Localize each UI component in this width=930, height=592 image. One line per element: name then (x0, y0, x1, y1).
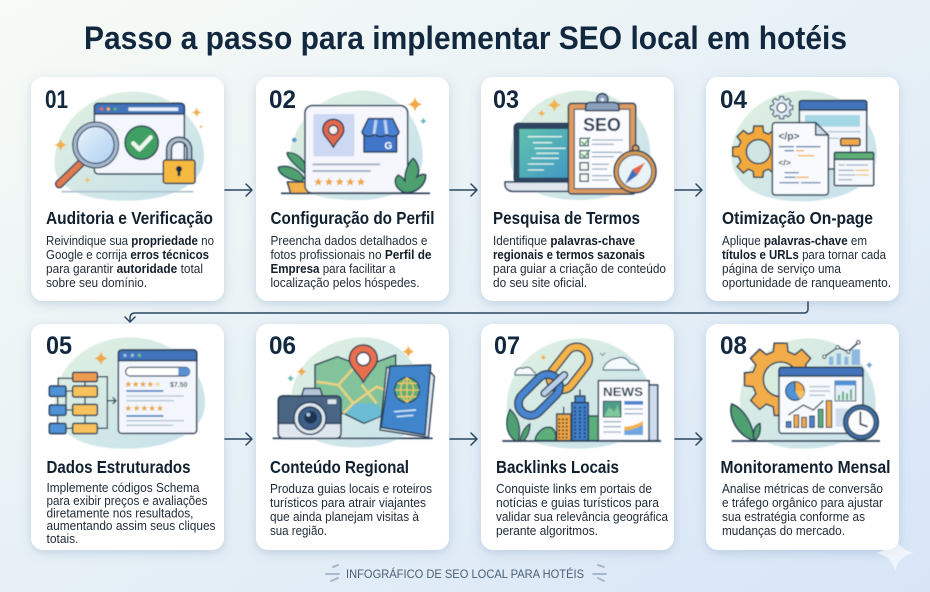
description: títulos e URLs para tornar cada (722, 247, 887, 262)
illustration: laptop, SEO clipboard and compass (505, 91, 656, 200)
panel: step 06 (256, 324, 449, 550)
description: Google e corrija erros técnicos (46, 247, 209, 262)
heading: Backlinks Locais (496, 457, 619, 477)
arrow: 05 to 06 (225, 433, 252, 445)
description: Aplique palavras-chave em (722, 233, 867, 248)
illustration: gear, analytics dashboard and clock (731, 338, 880, 449)
illustration: chain link, city and newspaper: NEWS (603, 385, 643, 399)
illustration: business profile card (278, 91, 430, 200)
illustration: schema diagram and search results: $7.50 (170, 382, 188, 389)
description: totais. (46, 531, 78, 546)
footer caption: INFOGRÁFICO DE SEO LOCAL PARA HOTÉIS (346, 566, 584, 581)
description: para exibir preços e avaliações (46, 493, 208, 508)
description: oportunidade de ranqueamento. (722, 275, 891, 290)
illustration: code document, gears and browser windows: </p> (778, 131, 800, 142)
description: sua estratégia conforme as (722, 509, 865, 524)
step number 04: 04 (720, 86, 747, 114)
panel: step 07 (481, 324, 674, 550)
panel: step 08 (706, 324, 899, 550)
description: Implemente códigos Schema (46, 480, 200, 495)
illustration: laptop, SEO clipboard and compass: SEO (583, 114, 621, 135)
description (722, 233, 891, 290)
arrow: 06 to 07 (450, 433, 477, 445)
description: localização pelos hóspedes. (270, 275, 420, 290)
illustration: code document, gears and browser windows: </> (778, 157, 791, 167)
description (46, 233, 214, 290)
description: diretamente nos resultados, (46, 506, 194, 520)
step number 02: 02 (269, 86, 296, 114)
description: perante algoritmos. (496, 523, 598, 538)
heading: Auditoria e Verificação (46, 208, 213, 228)
description: página de serviço uma (722, 261, 842, 276)
step number 03: 03 (493, 86, 519, 114)
description: Reivindique sua propriedade no (46, 233, 214, 248)
panel: step 02 (256, 77, 449, 301)
illustration: schema diagram and search results (49, 337, 205, 449)
description (496, 481, 669, 538)
illustration: camera, map and passport (273, 337, 434, 447)
description: regionais e termos sazonais (493, 247, 645, 262)
panel: step 05 (31, 324, 224, 550)
description: Preencha dados detalhados e (270, 233, 428, 248)
description: sua região. (270, 523, 327, 538)
description: Identifique palavras-chave (493, 233, 635, 248)
description: notícias e guias turísticos para (496, 495, 660, 510)
illustration: magnifier, check and padlock (54, 92, 204, 201)
arrow: 04 down and back to 05 (125, 302, 808, 322)
description: sobre seu domínio. (46, 275, 147, 290)
description: aumentando assim seus cliques (46, 518, 216, 533)
heading: Pesquisa de Termos (493, 208, 640, 228)
description (270, 481, 432, 538)
description: fotos profissionais no Perfil de (270, 247, 432, 262)
step number 05: 05 (46, 332, 72, 360)
description: turísticos para atrair viajantes (270, 495, 426, 510)
description (270, 233, 432, 290)
heading: Monitoramento Mensal (720, 457, 890, 477)
description: Produza guias locais e roteiros (270, 481, 432, 496)
step number 01: 01 (45, 86, 68, 114)
title: Passo a passo para implementar SEO local em hotéis (84, 20, 847, 56)
decorative sparkle (876, 534, 914, 572)
description: para garantir autoridade total (46, 261, 203, 276)
heading: Otimização On-page (722, 208, 873, 228)
step number 07: 07 (494, 332, 520, 360)
description (46, 480, 216, 546)
illustration: code document, gears and browser windows (731, 91, 877, 201)
description: e tráfego orgânico para ajustar (722, 495, 884, 510)
description: que ainda planejam visitas à (270, 509, 420, 524)
description: do seu site oficial. (493, 275, 587, 290)
description: validar sua relevância geográfica (496, 509, 669, 524)
description: Empresa para facilitar a (270, 261, 396, 276)
panel: step 04 (706, 77, 899, 301)
illustration: business profile card: G (384, 141, 392, 152)
step number 06: 06 (269, 332, 296, 360)
description: Analise métricas de conversão (722, 481, 883, 496)
panel: step 03 (481, 77, 674, 301)
arrow: 01 to 02 (225, 184, 252, 196)
illustration: chain link, city and newspaper (502, 338, 661, 449)
arrow: 03 to 04 (675, 184, 702, 196)
description: mudanças do mercado. (722, 523, 845, 538)
arrow: 07 to 08 (675, 433, 702, 445)
arrow: 02 to 03 (450, 184, 477, 196)
description: Conquiste links em portais de (496, 481, 652, 496)
description: para guiar a criação de conteúdo (493, 261, 666, 276)
description (722, 481, 884, 538)
heading: Dados Estruturados (46, 457, 191, 477)
description (493, 233, 666, 290)
step number 08: 08 (720, 332, 747, 360)
heading: Configuração do Perfil (270, 208, 434, 228)
panel: step 01 (31, 77, 224, 301)
heading: Conteúdo Regional (270, 457, 409, 477)
